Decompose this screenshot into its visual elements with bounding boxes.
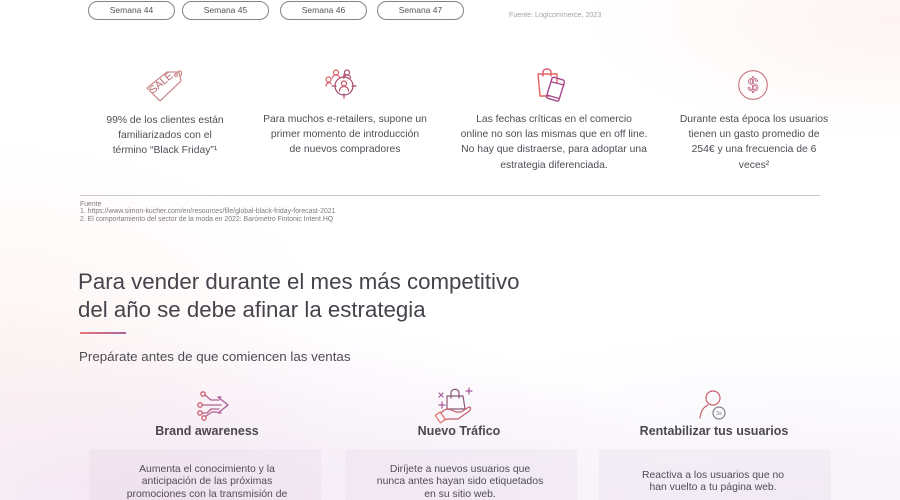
- footnotes: Fuente: [80, 201, 101, 208]
- footnotes: [80, 201, 336, 223]
- heading: Brand awareness: Brand awareness: [155, 424, 259, 438]
- text: average spend: tienen un gasto promedio de: [688, 129, 820, 140]
- text: critical dates: Las fechas críticas en el comercio: [476, 114, 632, 125]
- week pill: Semana 47: [377, 1, 464, 20]
- text: Rentabilizar tus usuarios: Reactiva a los usuarios que no: [642, 470, 784, 481]
- heading: Nuevo Tráfico: Nuevo Tráfico: [418, 424, 500, 438]
- text: critical dates: No hay que distraerse, para adoptar una: [461, 144, 647, 155]
- text: critical dates: [461, 114, 647, 171]
- week pill: Semana 46: Semana 46: [302, 5, 345, 15]
- text: e-retailers: primer momento de introducción: [271, 129, 419, 140]
- icon: circuit arrow: [197, 391, 229, 421]
- text: Black Friday familiarity: término “Black Friday”¹: [113, 145, 217, 156]
- text: Rentabilizar tus usuarios: [642, 470, 784, 493]
- week pill: Semana 44: Semana 44: [110, 5, 153, 15]
- text: average spend: 254€ y una frecuencia de 6: [692, 144, 816, 155]
- text: average spend: [680, 114, 828, 171]
- text: Brand awareness: Aumenta el conocimiento y la: [139, 464, 275, 475]
- text: Nuevo Tráfico: nunca antes hayan sido etiquetados: [377, 476, 543, 487]
- accent rule: [80, 332, 126, 334]
- text: Brand awareness: [127, 464, 287, 500]
- icon: user with badge: [699, 390, 726, 420]
- icon: hand with bag: [434, 387, 473, 424]
- text: Brand awareness: anticipación de las próximas: [142, 476, 272, 487]
- source note: Fuente: Logicommerce, 2023: [509, 11, 601, 19]
- icon: dollar coin: [738, 70, 768, 100]
- subtitle: Prepárate antes de que comiencen las ventas: [79, 349, 350, 364]
- text: e-retailers: [263, 114, 427, 155]
- week pill: Semana 47: Semana 47: [399, 5, 442, 15]
- icon: dollar coin: $: [748, 76, 759, 96]
- text: e-retailers: Para muchos e-retailers, supone un: [263, 114, 427, 125]
- section title: [78, 269, 520, 322]
- text: Nuevo Tráfico: en su sitio web.: [424, 489, 496, 500]
- week pill: Semana 45: [182, 1, 269, 20]
- icon: bag and phone: [537, 68, 566, 102]
- text: critical dates: estrategia diferenciada.: [500, 160, 608, 171]
- card: Rentabilizar tus usuarios: [599, 449, 831, 500]
- text: Nuevo Tráfico: Diríjete a nuevos usuarios que: [390, 464, 530, 475]
- icon: target customers: [325, 69, 357, 99]
- text: Nuevo Tráfico: [377, 464, 543, 500]
- divider: [80, 195, 820, 196]
- text: Black Friday familiarity: 99% de los clientes están: [106, 115, 224, 126]
- footnotes: 1. https://www.simon-kucher.com/en/resources/file/global-black-friday-forecast-2021: [80, 208, 335, 215]
- section title: del año se debe afinar la estrategia: [78, 297, 426, 322]
- card: Brand awareness: [89, 449, 321, 500]
- heading: Rentabilizar tus usuarios: Rentabilizar tus usuarios: [640, 424, 788, 438]
- text: Black Friday familiarity: familiarizados con el: [118, 130, 212, 141]
- week pill: Semana 46: [280, 1, 367, 20]
- week pill: Semana 45: Semana 45: [204, 5, 247, 15]
- text: e-retailers: de nuevos compradores: [290, 144, 400, 155]
- text: Rentabilizar tus usuarios: han vuelto a tu página web.: [649, 482, 777, 493]
- footnotes: 2. El comportamiento del sector de la moda en 2022: Barómetro Fintonic Intent HQ: [80, 216, 333, 223]
- icon: sale tag: [146, 70, 182, 102]
- section title: Para vender durante el mes más competitivo: [78, 269, 520, 294]
- text: Black Friday familiarity: [106, 115, 224, 156]
- week pill: Semana 44: [88, 1, 175, 20]
- card: Nuevo Tráfico: [345, 449, 577, 500]
- icon: sale tag: SALE: [147, 70, 176, 96]
- icon: user with badge: 3s: [716, 411, 722, 417]
- text: average spend: Durante esta época los usuarios: [680, 114, 828, 125]
- text: average spend: veces²: [739, 160, 769, 171]
- text: Brand awareness: promociones con la transmisión de: [127, 489, 287, 500]
- text: critical dates: online no son las mismas que en off line.: [461, 129, 647, 140]
